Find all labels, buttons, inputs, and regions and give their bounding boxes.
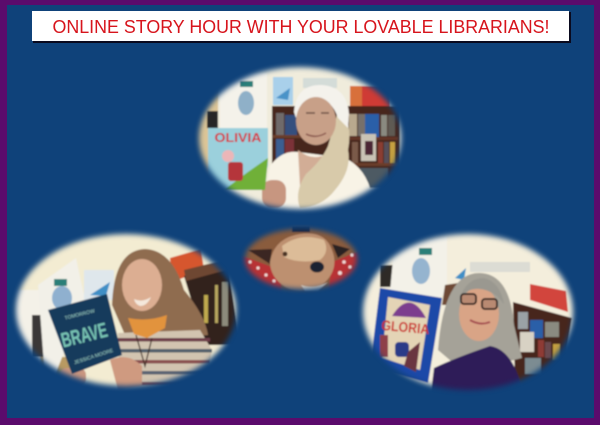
title banner: ONLINE STORY HOUR WITH YOUR LOVABLE LIBRARIANS! <box>52 17 550 37</box>
wall drawings <box>84 270 114 300</box>
bookshelf and red poster <box>442 282 572 392</box>
wall poster <box>390 236 447 298</box>
Brave book: JESSICA MOORE <box>73 348 115 366</box>
photo: plush dog puppet <box>241 226 361 292</box>
wall drawings <box>455 262 530 280</box>
photo: librarian with Gloria book <box>355 225 580 400</box>
Brave book <box>48 294 122 374</box>
red star cushion <box>243 252 359 289</box>
door and poster <box>38 258 85 375</box>
bookshelf and red poster <box>170 249 240 345</box>
wall poster <box>220 73 267 128</box>
Olivia book <box>208 128 268 190</box>
Brave book: TOMORROW <box>64 308 96 322</box>
colourful posters <box>273 77 390 106</box>
photo: librarian with Olivia book <box>190 60 410 220</box>
librarian with scarf and striped top <box>60 249 212 392</box>
librarian with glasses and purple top <box>430 273 524 400</box>
photo: librarian with A Tomorrow Brave book <box>12 230 240 390</box>
Brave book: BRAVE <box>59 319 110 353</box>
bookshelf <box>272 106 400 188</box>
dog head <box>270 233 334 291</box>
Olivia book: OLIVIA <box>214 130 262 145</box>
title banner <box>32 11 571 43</box>
Gloria book <box>370 288 442 383</box>
Gloria book: GLORIA <box>381 317 430 337</box>
dark ears <box>248 226 350 264</box>
librarian in white sweater <box>262 85 372 215</box>
